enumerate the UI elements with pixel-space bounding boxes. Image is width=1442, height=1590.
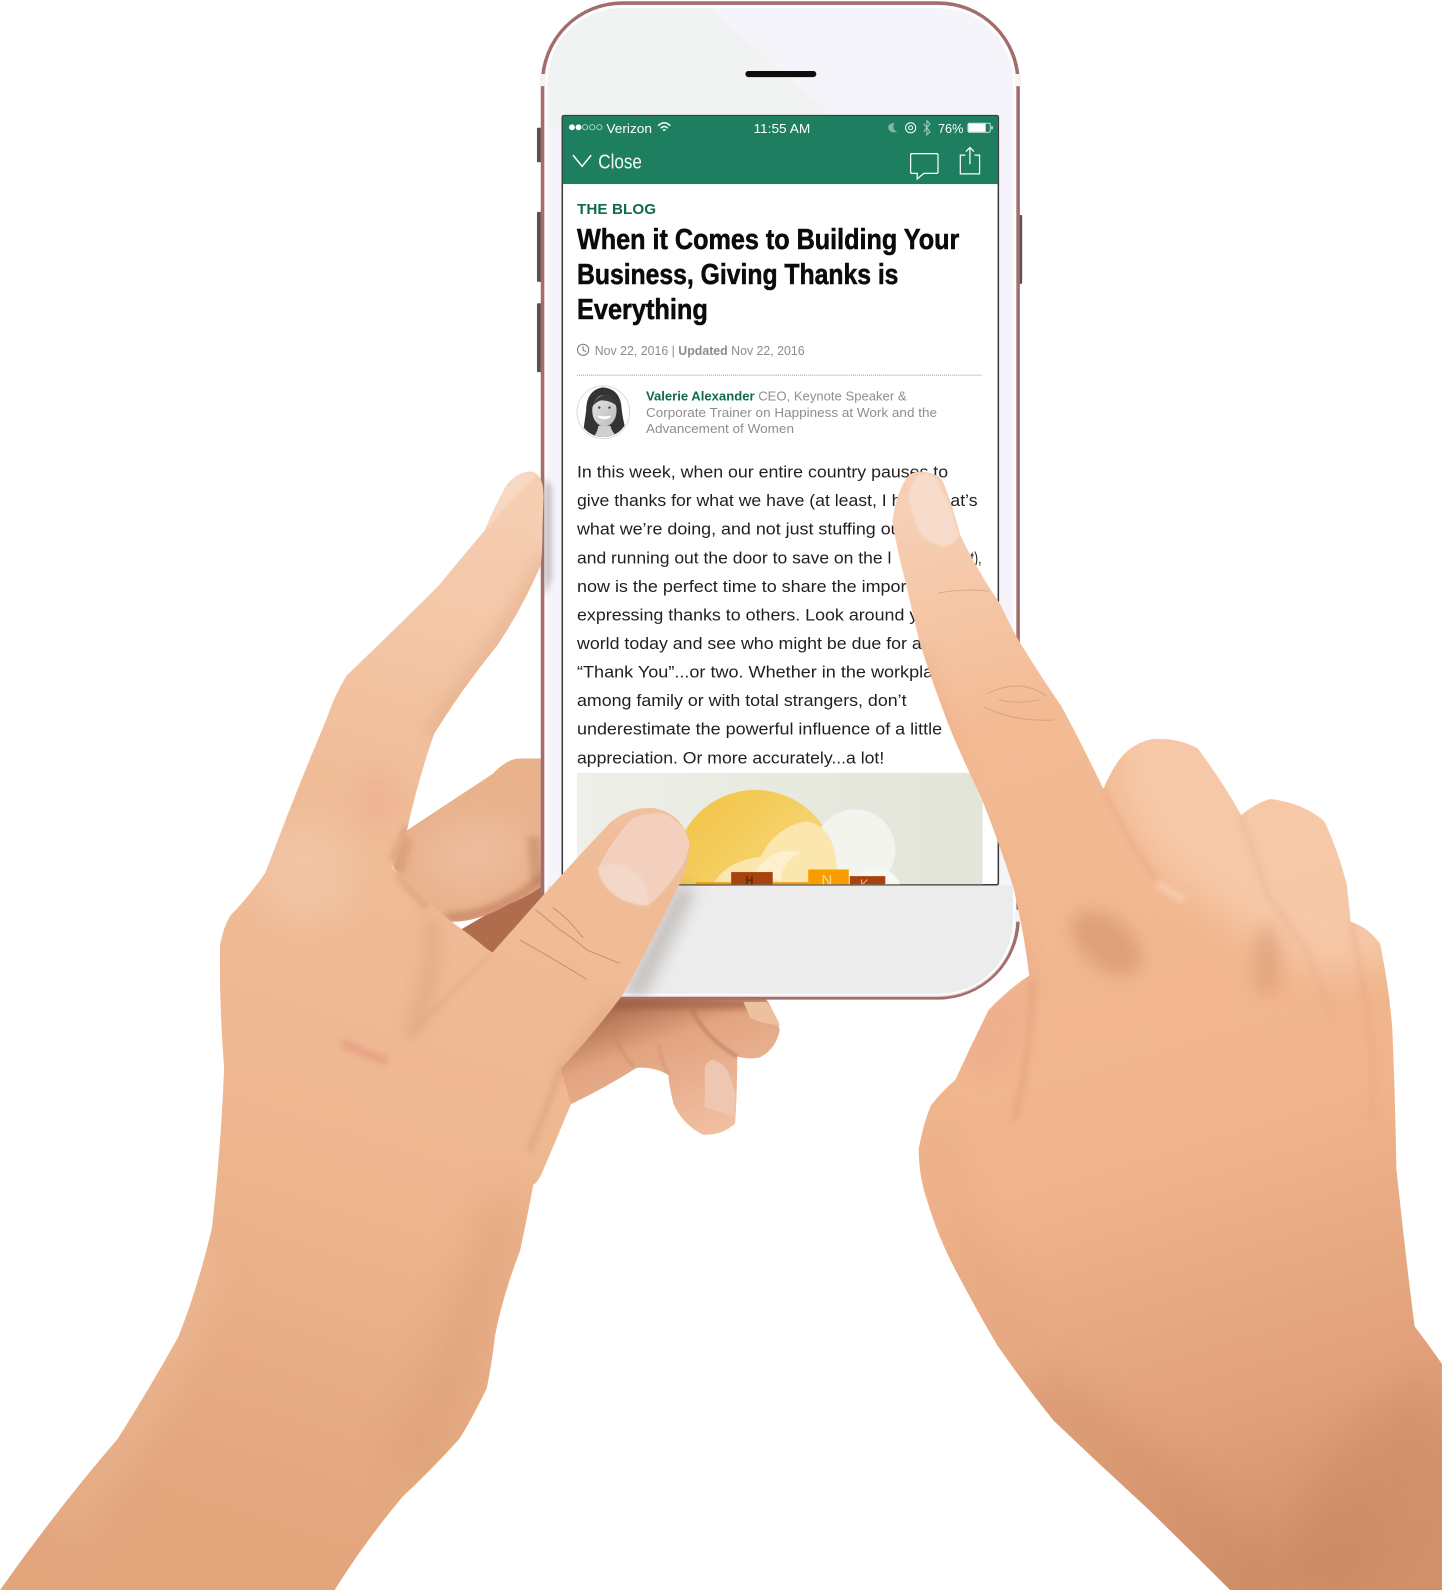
article body text: underestimate the powerful influence of a little xyxy=(577,720,942,739)
upper fingernail xyxy=(743,1002,780,1025)
status bar: signal dots xyxy=(569,124,602,130)
icon: clock xyxy=(578,344,589,355)
article image: sun and letter blocks: H xyxy=(745,875,753,887)
article headline: Everything xyxy=(577,294,708,326)
icon: wifi xyxy=(658,123,670,131)
thumbnail xyxy=(598,813,690,906)
article body text: now is the perfect time to share the importance of xyxy=(577,577,971,596)
app header bar: Verizon xyxy=(606,122,652,136)
icon: battery xyxy=(968,123,993,132)
screen glare and lower bezel xyxy=(537,0,1024,1002)
article body text: appreciation. Or more accurately...a lot! xyxy=(577,748,884,767)
article image: sun and letter blocks: N xyxy=(821,872,832,889)
author byline xyxy=(646,389,937,436)
article body text: what we’re doing, and not just stuffing our faces xyxy=(576,520,954,539)
article image: sun and letter blocks: K xyxy=(860,876,869,891)
author byline: Advancement of Women xyxy=(646,421,794,436)
phone xyxy=(537,0,1024,1002)
app header bar xyxy=(563,116,998,184)
author avatar xyxy=(577,386,630,439)
article image: sun and letter blocks xyxy=(577,772,982,884)
author byline: Corporate Trainer on Happiness at Work and the xyxy=(646,405,937,420)
app header bar: Close xyxy=(598,151,642,173)
app header bar: 76% xyxy=(938,122,963,136)
article body text: and running out the door to save on the l xyxy=(577,548,891,567)
finger knuckle creases xyxy=(938,590,1054,720)
article body text: expressing thanks to others. Look around your xyxy=(577,606,944,625)
app header bar: 11:55 AM xyxy=(753,122,810,136)
article body text xyxy=(576,463,982,767)
soft shadows on phone xyxy=(544,477,694,997)
article body text: atest gadget), xyxy=(906,548,982,567)
side buttons xyxy=(537,128,1022,372)
icon: close chevron xyxy=(573,155,591,166)
author byline: Valerie Alexander CEO, Keynote Speaker & xyxy=(646,389,907,404)
article kicker: THE BLOG xyxy=(577,201,656,218)
index fingernail xyxy=(909,474,959,547)
article body text: give thanks for what we have (at least, I hope that’s xyxy=(577,491,978,510)
icon: rotation lock xyxy=(906,123,916,133)
article body text: among family or with total strangers, don’t xyxy=(577,691,907,710)
icon: comment xyxy=(911,154,938,179)
screen xyxy=(562,116,998,885)
thumb knuckle creases xyxy=(520,908,620,980)
article headline: Business, Giving Thanks is xyxy=(577,259,898,291)
article body text: In this week, when our entire country pauses to xyxy=(577,463,948,482)
article body text: world today and see who might be due for a xyxy=(576,634,922,653)
fingers behind phone, left hand xyxy=(393,758,780,1135)
antenna bands xyxy=(539,74,1021,922)
article headline xyxy=(577,224,959,326)
speaker xyxy=(745,71,816,77)
article headline: When it Comes to Building Your xyxy=(577,224,959,256)
index fingernail xyxy=(485,473,537,532)
lower fingernail xyxy=(705,1060,735,1116)
phone body xyxy=(543,3,1018,998)
icon: moon xyxy=(888,123,897,132)
article body text: “Thank You”...or two. Whether in the workplace, xyxy=(577,662,957,681)
publication date: Nov 22, 2016 | Updated Nov 22, 2016 xyxy=(595,344,805,358)
right hand: pointing index finger and back of hand xyxy=(892,472,1442,1590)
icon: share xyxy=(960,148,980,174)
icon: bluetooth xyxy=(924,121,930,135)
left hand: index finger, palm, thumb and wrist xyxy=(0,472,690,1590)
